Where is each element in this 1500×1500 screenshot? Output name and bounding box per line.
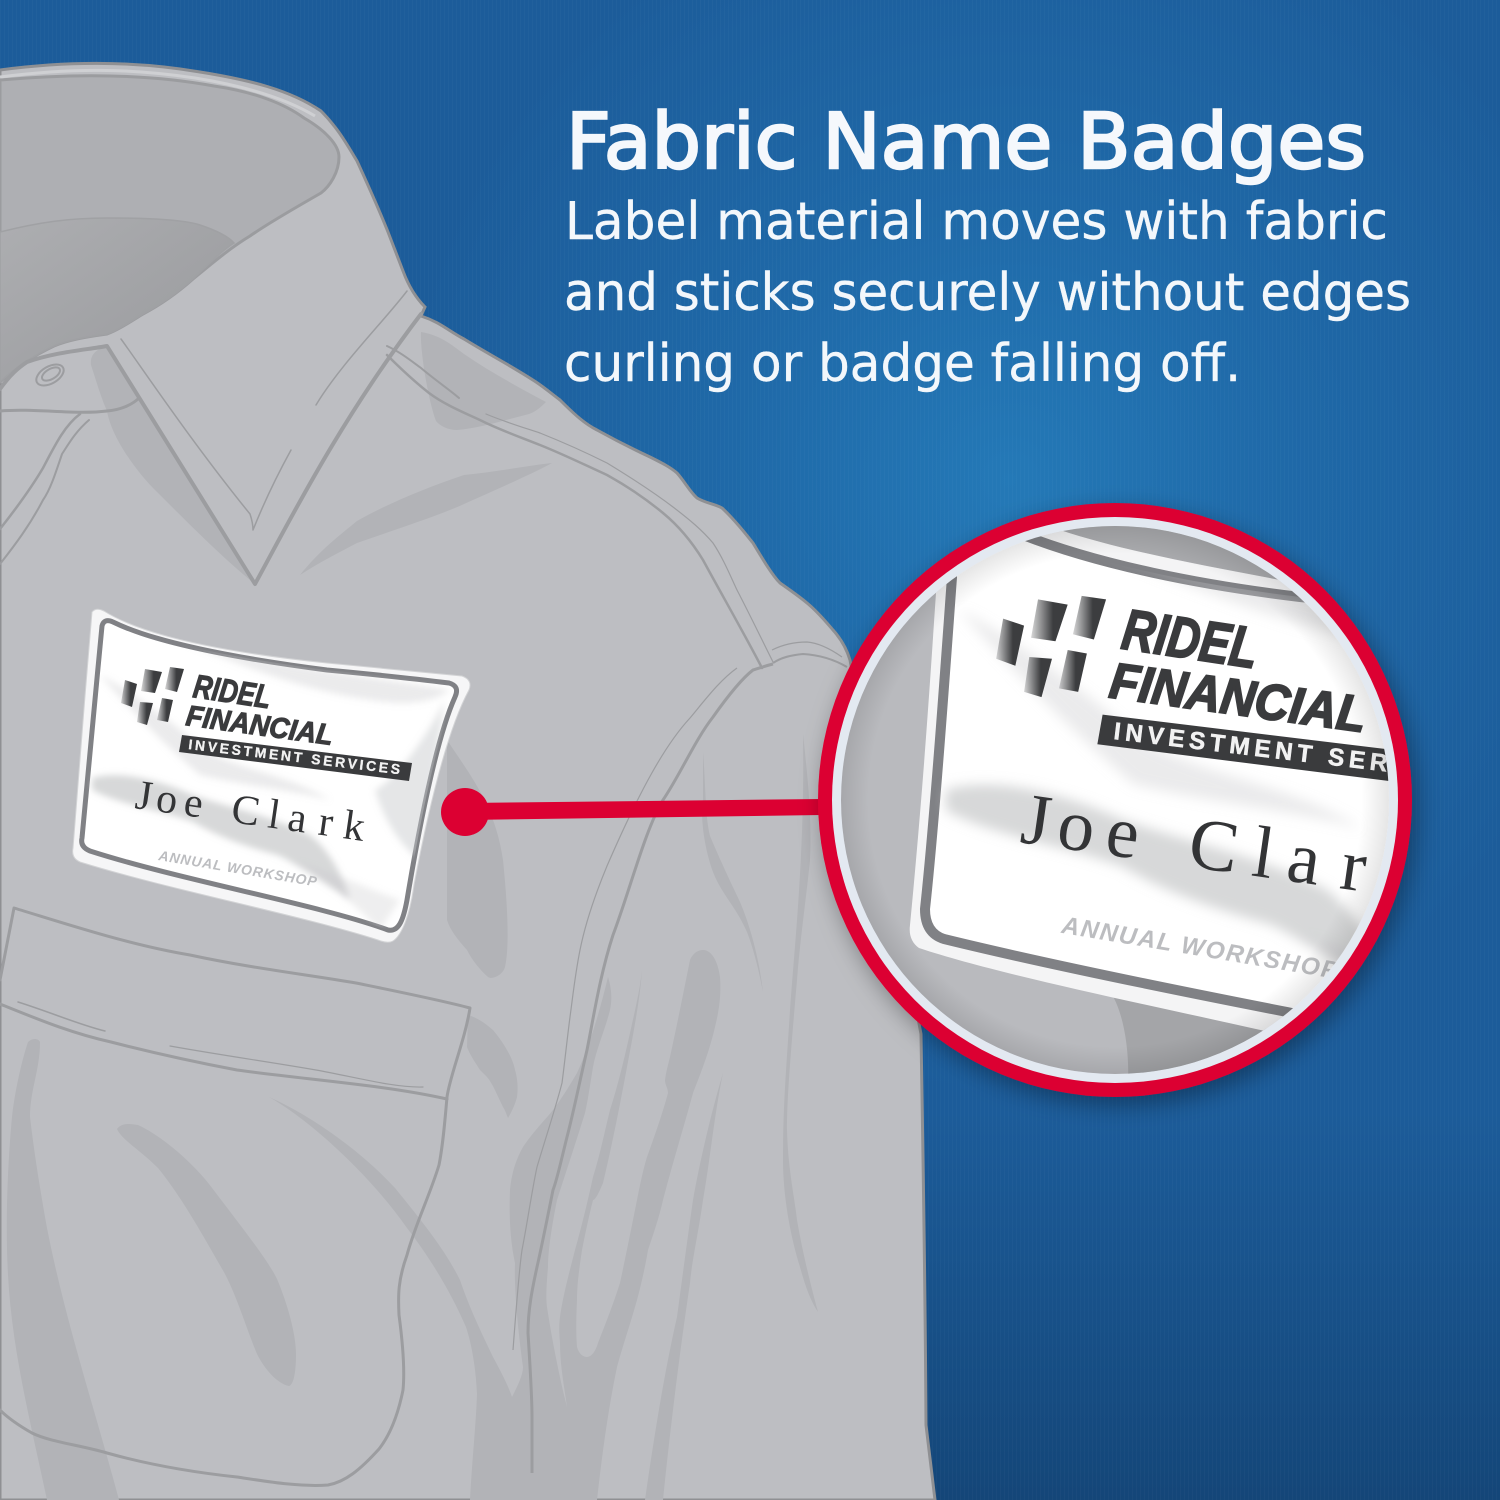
fabric creases — [92, 640, 450, 930]
magnifier red ring — [818, 503, 1412, 1097]
badge border — [82, 621, 457, 930]
magnified event line: ANNUAL WORKSHOP — [1059, 912, 1340, 985]
magnified badge view — [841, 526, 1389, 1074]
connector dot — [441, 788, 489, 836]
collar back panel — [0, 218, 234, 382]
event line: ANNUAL WORKSHOP — [157, 847, 319, 889]
name badge on shirt — [73, 609, 470, 942]
magnified tagline bar — [1097, 714, 1388, 781]
title: Fabric Name Badges — [566, 98, 1366, 187]
logo: FINANCIAL: FINANCIAL — [184, 700, 335, 752]
magnified name: Joe Clark — [1017, 778, 1427, 915]
description text — [564, 192, 1411, 394]
magnifier inner ring — [832, 517, 1398, 1083]
logo: tagline: INVESTMENT SERVICES — [188, 736, 401, 777]
magnified tagline: INVESTMENT SERVICES — [1112, 718, 1485, 789]
magnified shirt fold — [1064, 526, 1278, 580]
logo: tagline bar — [179, 735, 412, 781]
sleeve seam lines — [513, 642, 847, 1473]
logo: RIDEL: RIDEL — [191, 667, 274, 715]
collar top highlight — [0, 70, 315, 116]
pocket lines — [0, 908, 470, 1485]
magnified shirt — [841, 526, 1292, 1074]
magnifier callout — [818, 490, 1500, 1097]
fold shadows — [7, 332, 818, 1500]
name: Joe Clark — [133, 772, 368, 851]
badge backing — [73, 609, 470, 942]
magnified logo mark — [996, 596, 1106, 697]
illustration: grey shirt — [0, 64, 935, 1500]
collar and placket lines — [0, 291, 773, 668]
description text: curling or badge falling off. — [564, 334, 1241, 394]
lens edge shading — [841, 526, 1389, 1074]
magnified RIDEL: RIDEL — [1118, 598, 1262, 681]
magnified badge border — [920, 536, 1389, 1016]
shirt button — [33, 360, 67, 390]
collar interior — [0, 76, 339, 382]
connector line — [465, 799, 822, 820]
shirt body — [0, 64, 935, 1500]
magnified creases — [941, 573, 1361, 966]
magnified shirt shadow — [1114, 998, 1266, 1074]
logo mark — [121, 667, 184, 725]
magnified badge content — [996, 596, 1388, 977]
magnified badge backing — [910, 531, 1389, 1030]
description text: and sticks securely without edges — [564, 263, 1411, 323]
description text: Label material moves with fabric — [565, 192, 1388, 252]
magnified FINANCIAL: FINANCIAL — [1106, 652, 1370, 743]
